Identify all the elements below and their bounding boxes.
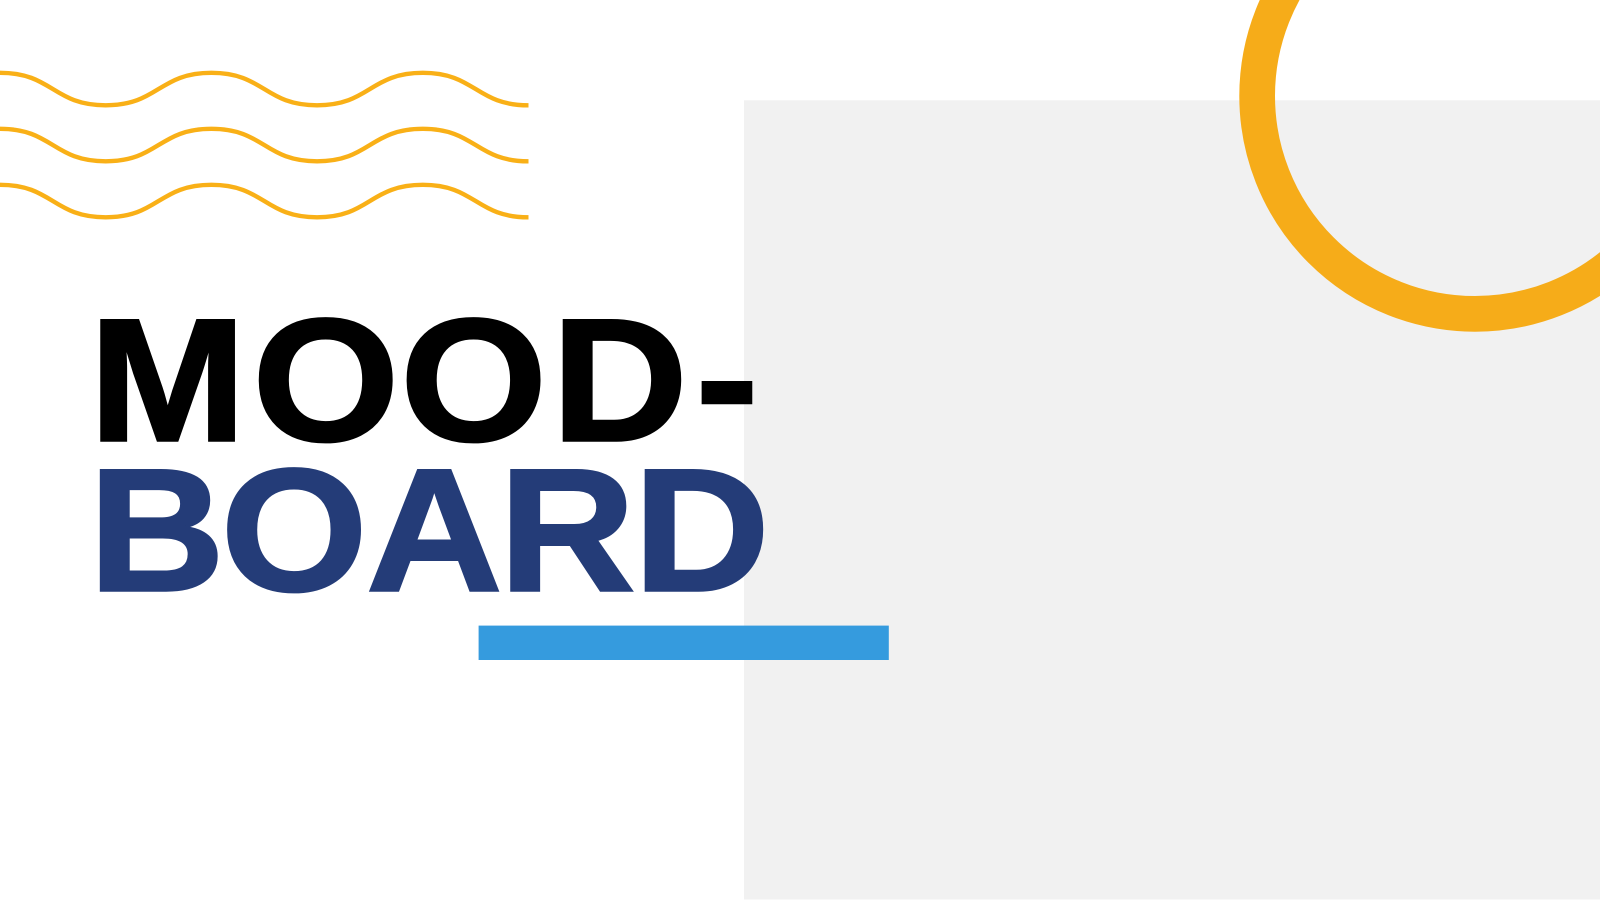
panel: grey background [744, 100, 1600, 900]
accent bar: blue [479, 626, 889, 660]
ring: orange circle [1257, 0, 1600, 314]
wave 3 [0, 185, 528, 217]
wave 2 [0, 129, 528, 161]
title [89, 279, 770, 628]
wavy lines [0, 73, 528, 217]
title line 1: MOOD- [89, 279, 758, 478]
title line 2: BOARD [89, 432, 770, 628]
wave 1 [0, 73, 528, 105]
